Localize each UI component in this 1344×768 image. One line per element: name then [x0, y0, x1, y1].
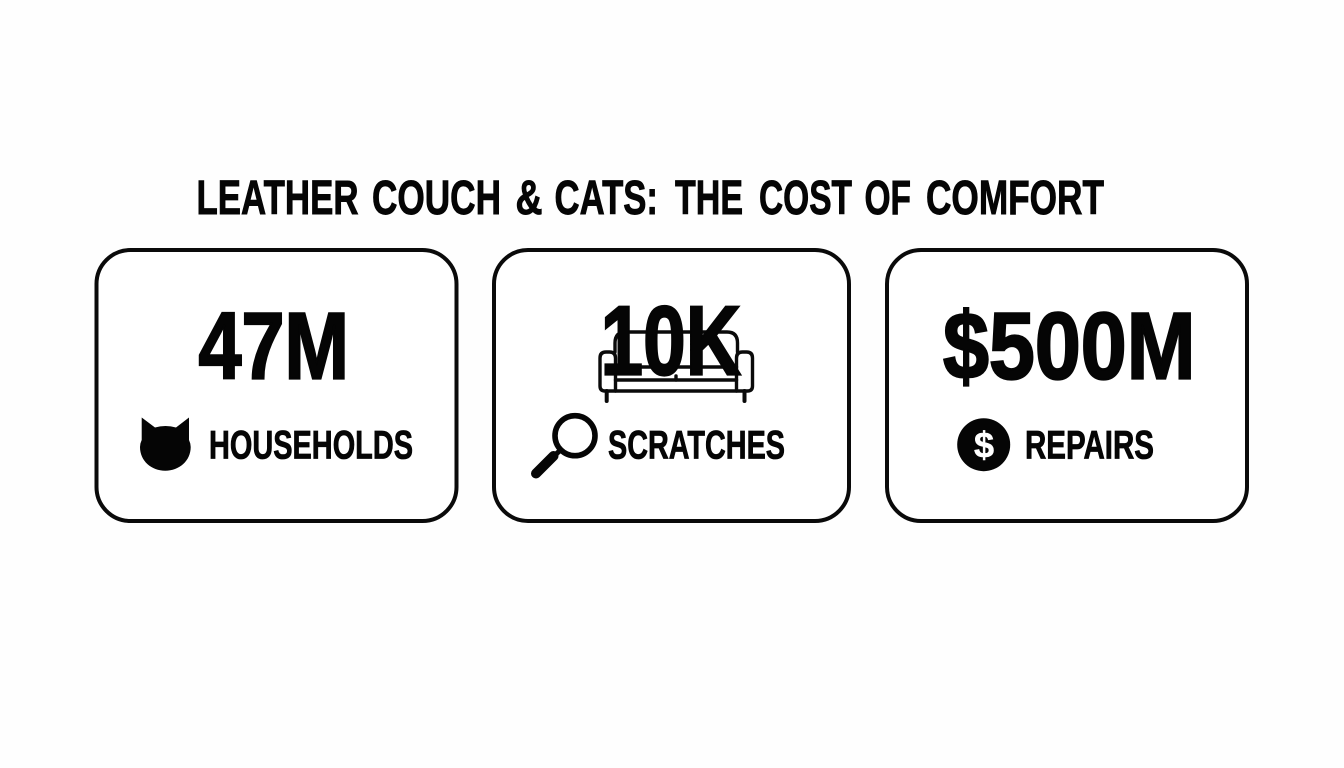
stat: $500M: $500M	[943, 294, 1196, 400]
title: THE	[675, 171, 743, 225]
panel: repairs	[887, 250, 1247, 521]
card outline: repairs	[887, 250, 1247, 521]
stat: 10K: 10K	[600, 286, 741, 396]
title	[196, 171, 1104, 225]
title: COUCH	[372, 171, 501, 225]
icon: couch	[600, 332, 752, 401]
stat: 47M: 47M	[198, 294, 349, 400]
icon: dollar coin	[957, 418, 1010, 471]
title: LEATHER	[196, 171, 358, 225]
title: COMFORT	[926, 171, 1104, 225]
label: scratches: SCRATCHES	[608, 424, 785, 468]
panel: households	[96, 250, 456, 521]
card outline: households	[96, 250, 456, 521]
title: &	[516, 171, 542, 225]
icon: cat head	[140, 418, 191, 471]
card outline: scratches	[494, 250, 849, 521]
label: repairs: REPAIRS	[1025, 424, 1154, 468]
panel: scratches	[494, 250, 849, 521]
title: CATS:	[554, 171, 658, 225]
title: COST	[759, 171, 852, 225]
icon: magnifying glass	[536, 416, 595, 474]
title: OF	[864, 171, 911, 225]
label: households: HOUSEHOLDS	[209, 424, 413, 468]
icon: dollar coin: $	[974, 424, 994, 466]
